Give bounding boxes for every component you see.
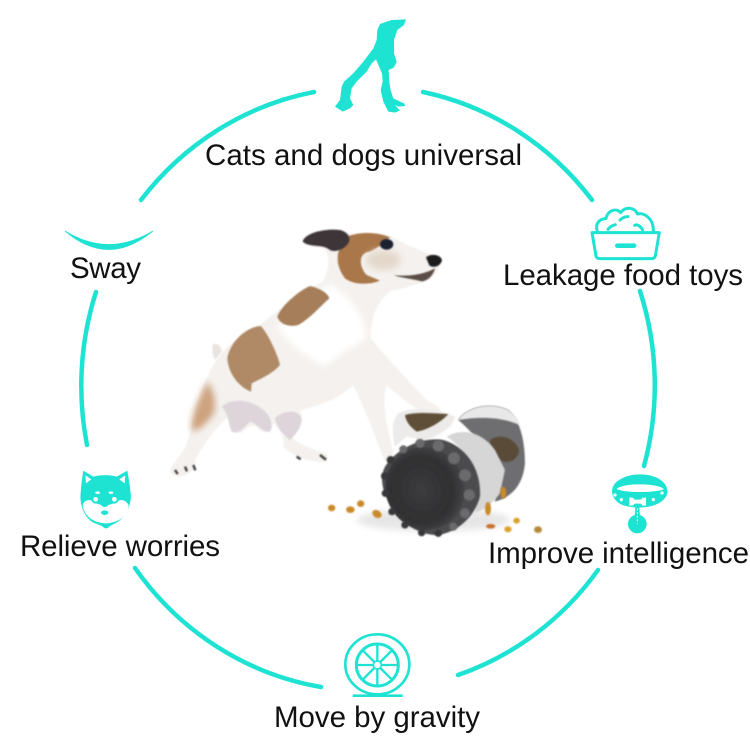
- label: relieve worries: Relieve worries: [20, 530, 220, 563]
- toy: food in capsule: [405, 413, 448, 432]
- label: leakage food toys: Leakage food toys: [503, 259, 743, 292]
- nose: [426, 255, 442, 267]
- icon: shiba dog face: [80, 471, 131, 528]
- tag link: [635, 506, 640, 517]
- dog body: [170, 230, 441, 477]
- ear: [303, 230, 349, 251]
- ground line: [353, 692, 403, 700]
- collar studs and bone: [613, 491, 664, 506]
- head brown patch: [338, 233, 390, 284]
- cheek shading: [366, 250, 401, 270]
- toy: right capsule highlight: [458, 406, 520, 425]
- toy: clear capsule top left: [393, 409, 455, 447]
- food kibble: [328, 487, 542, 533]
- tail: [212, 344, 222, 360]
- toy: food in right capsule: [490, 437, 519, 462]
- spokes: [357, 644, 398, 686]
- eyes and brows: [93, 491, 117, 502]
- label: sway: Sway: [70, 252, 141, 285]
- ring of arc segments: [81, 92, 655, 687]
- label: improve intelligence: Improve intelligence: [488, 537, 749, 570]
- toy: translucent middle: [447, 432, 505, 513]
- brown shoulder patch: [277, 286, 329, 326]
- toy: wheel teeth: [381, 456, 442, 537]
- heading: cats and dogs universal: Cats and dogs universal: [205, 139, 522, 172]
- toes: [175, 455, 326, 474]
- icon: wheel on ground: [345, 634, 409, 696]
- eye rings: [91, 495, 119, 504]
- belly shadow: [222, 401, 302, 440]
- brown back patch: [227, 326, 280, 392]
- label: move by gravity: Move by gravity: [274, 701, 480, 734]
- collar band: [612, 474, 667, 507]
- icon: dog and cat silhouette: [335, 19, 406, 113]
- toy: black wheel rim: [382, 439, 480, 535]
- icon: collar with bone tag: [612, 474, 667, 533]
- head: [80, 471, 131, 528]
- tag highlight: [636, 508, 639, 524]
- round tag: [628, 515, 647, 533]
- toy: right capsule: [458, 406, 525, 502]
- eye: [380, 239, 393, 250]
- icon: sway curve: [65, 231, 153, 250]
- toy: wheel studs: [399, 439, 475, 531]
- white chest highlight: [277, 283, 367, 367]
- toy: wheel face: [374, 436, 476, 541]
- icon: food bowl with bone: [592, 208, 659, 259]
- illustration: dog playing with toy: [170, 230, 542, 541]
- rim: [356, 644, 398, 686]
- tyre: [345, 634, 409, 694]
- hub: [373, 661, 381, 669]
- brown hind leg patch: [191, 382, 215, 431]
- nose and mouth: [101, 502, 108, 515]
- mouth: [393, 268, 435, 281]
- face white: [83, 500, 129, 523]
- ground shadow: [357, 509, 510, 531]
- ear inners: [85, 475, 125, 483]
